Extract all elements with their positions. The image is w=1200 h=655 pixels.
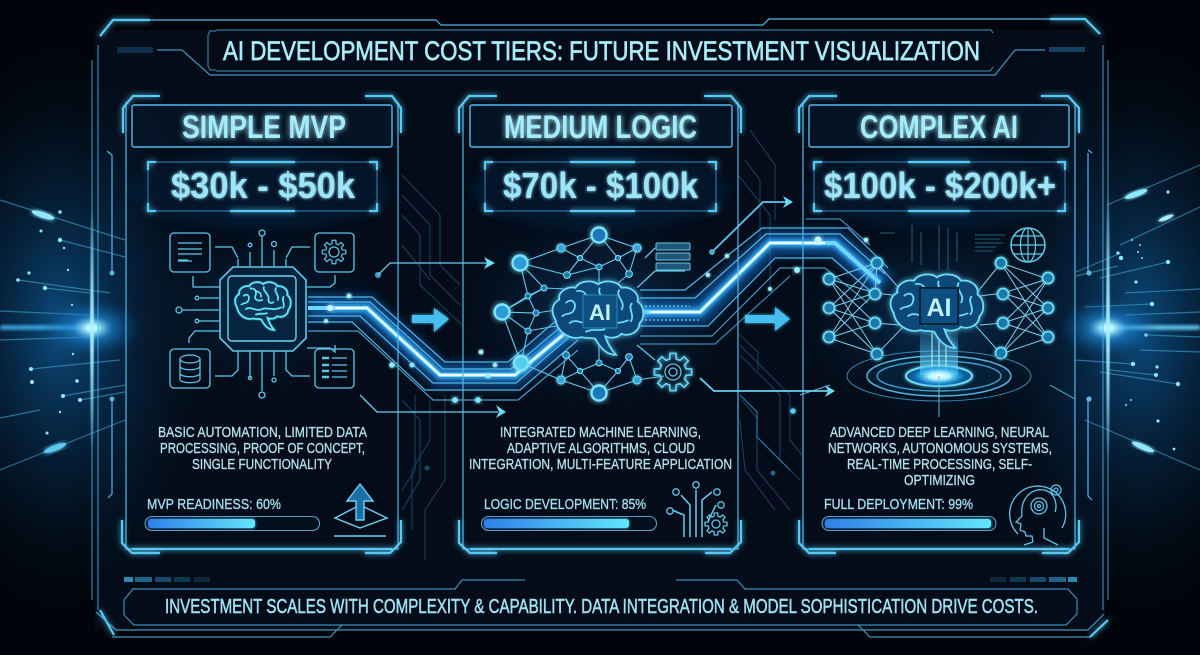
icon: holographic platform bbox=[800, 322, 1075, 417]
header: simple MVP bbox=[132, 105, 392, 147]
progress: full deployment 99%: FULL DEPLOYMENT: 99% bbox=[824, 496, 973, 513]
header: complex AI bbox=[809, 105, 1069, 147]
description: SINGLE FUNCTIONALITY bbox=[192, 456, 332, 473]
price: $30k - $50k: $30k - $50k bbox=[171, 165, 356, 206]
icon: AI head profile bbox=[1010, 485, 1066, 545]
description bbox=[828, 424, 1052, 489]
icon: data stack bbox=[637, 243, 690, 287]
header: medium logic: MEDIUM LOGIC bbox=[504, 109, 697, 145]
description: REAL-TIME PROCESSING, SELF- bbox=[847, 456, 1032, 473]
header: complex AI: COMPLEX AI bbox=[860, 109, 1018, 145]
horizontal light beams and flares bbox=[0, 298, 1200, 358]
icon: database bbox=[170, 349, 210, 388]
progress: logic development 85%: LOGIC DEVELOPMENT: 85% bbox=[484, 496, 646, 513]
footer banner bbox=[124, 577, 1077, 625]
progress: logic development 85% bbox=[482, 496, 656, 530]
panel frame bbox=[459, 96, 741, 553]
header: simple MVP: SIMPLE MVP bbox=[182, 109, 346, 145]
arrow: rising to complex bbox=[709, 196, 793, 255]
panel frame bbox=[799, 96, 1079, 553]
right side light rays bbox=[1075, 165, 1200, 470]
price: $100k - $200k+: $100k - $200k+ bbox=[824, 165, 1056, 206]
data flow stream: chip to medium brain bbox=[308, 272, 578, 403]
background circuit traces bbox=[375, 130, 802, 560]
description: BASIC AUTOMATION, LIMITED DATA bbox=[158, 424, 367, 441]
data flow stream: medium brain to complex AI bbox=[630, 219, 888, 344]
progress: MVP readiness 60%: MVP READINESS: 60% bbox=[147, 496, 281, 513]
icon: circuit tree with gear bbox=[667, 482, 727, 537]
panel: simple MVP bbox=[122, 96, 401, 553]
progress: full deployment 99% bbox=[822, 496, 996, 530]
icon: document bbox=[170, 233, 210, 272]
icon: AI brain: AI bbox=[589, 300, 611, 325]
description: PROCESSING, PROOF OF CONCEPT, bbox=[160, 440, 365, 457]
icon: upload arrow bbox=[334, 484, 387, 536]
arrow: wide to complex bbox=[745, 307, 790, 331]
icon: gear bbox=[315, 233, 354, 272]
price: $70k - $100k: $70k - $100k bbox=[503, 165, 699, 206]
icon: deep neural network bbox=[824, 258, 1054, 360]
panel frame bbox=[122, 96, 401, 553]
arrow: lower thin to complex bbox=[700, 378, 835, 470]
description bbox=[469, 424, 732, 473]
arrows between panels bbox=[360, 196, 835, 470]
icon: checklist bbox=[315, 349, 354, 388]
description bbox=[158, 424, 367, 473]
arrow: wide to medium bbox=[412, 308, 449, 332]
description: ADVANCED DEEP LEARNING, NEURAL bbox=[830, 424, 1049, 441]
description: OPTIMIZING bbox=[904, 472, 975, 489]
panel: complex AI bbox=[799, 96, 1079, 553]
icon: neural mesh bbox=[494, 228, 664, 400]
icon: gear bbox=[637, 345, 692, 391]
icon: AI brain bbox=[891, 274, 983, 348]
description: INTEGRATION, MULTI-FEATURE APPLICATION bbox=[469, 456, 732, 473]
left side light rays bbox=[0, 200, 125, 470]
arrow: upper thin to medium bbox=[378, 257, 495, 275]
panel: medium logic bbox=[459, 96, 741, 553]
icon: data lines bbox=[880, 225, 1005, 270]
arrow: lower thin to medium bbox=[360, 395, 506, 418]
icon: globe bbox=[1011, 228, 1045, 262]
icon: AI brain: AI bbox=[926, 294, 952, 322]
description: ADAPTIVE ALGORITHMS, CLOUD bbox=[507, 440, 695, 457]
progress: MVP readiness 60% bbox=[145, 496, 320, 530]
title plate bbox=[117, 30, 1085, 75]
icon: AI brain bbox=[553, 281, 643, 355]
title text: AI DEVELOPMENT COST TIERS: FUTURE INVESTMENT VISUALIZATION bbox=[223, 36, 980, 66]
description: INTEGRATED MACHINE LEARNING, bbox=[500, 424, 701, 441]
icon: AI chip with brain bbox=[176, 230, 335, 398]
description: NETWORKS, AUTONOMOUS SYSTEMS, bbox=[828, 440, 1052, 457]
